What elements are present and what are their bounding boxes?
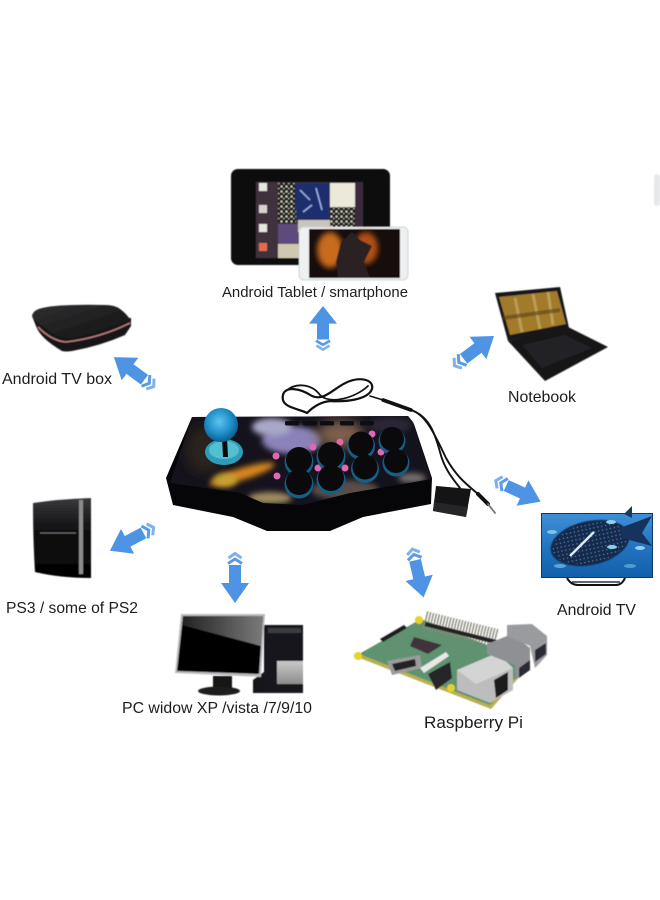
action buttons: [284, 427, 410, 498]
label: Android TV box: Android TV box: [2, 371, 112, 388]
panel: android tablet and smartphone: [222, 169, 408, 301]
arrow: to tablet: [309, 306, 337, 350]
label: Android Tablet / smartphone: Android Tablet / smartphone: [222, 285, 408, 301]
label: PC widow XP /vista /7/9/10: PC widow XP /vista /7/9/10: [122, 700, 312, 717]
arrow: to pc: [221, 554, 249, 603]
label: Android TV: Android TV: [557, 602, 636, 619]
panel: raspberry pi: [354, 616, 547, 732]
icon: desktop computer: [175, 614, 303, 696]
panel: android tv box: [2, 305, 131, 388]
arrow: to android tv: [490, 468, 547, 514]
icon: laptop: [495, 287, 608, 381]
icon: television: [541, 506, 653, 585]
arrow: to raspberry pi: [399, 546, 437, 601]
arrow: to ps3: [103, 515, 160, 563]
label: Notebook: Notebook: [508, 389, 577, 406]
cable: [283, 379, 495, 513]
panel: ps3: [6, 498, 138, 617]
joystick: [204, 408, 243, 465]
arrow: to notebook: [446, 325, 502, 377]
icon: ps3 console: [33, 498, 91, 578]
stick artwork: [165, 415, 435, 507]
arrow: to tv box: [106, 346, 162, 398]
icon: tablet: [231, 169, 390, 265]
arcade stick: [165, 379, 495, 531]
panel: android tv: [541, 506, 653, 619]
label: Raspberry Pi: Raspberry Pi: [424, 713, 523, 732]
menu buttons: [285, 421, 374, 426]
icon: raspberry pi board: [354, 616, 547, 709]
ps2 connector: [433, 486, 471, 517]
panel: pc: [122, 614, 312, 717]
infographic: arcade stick compatibility: [2, 168, 660, 732]
icon: tv box: [32, 305, 131, 352]
stick body: [166, 416, 432, 531]
label: PS3 / some of PS2: PS3 / some of PS2: [6, 600, 138, 617]
icon: smartphone: [299, 227, 408, 280]
panel: notebook: [495, 287, 608, 406]
